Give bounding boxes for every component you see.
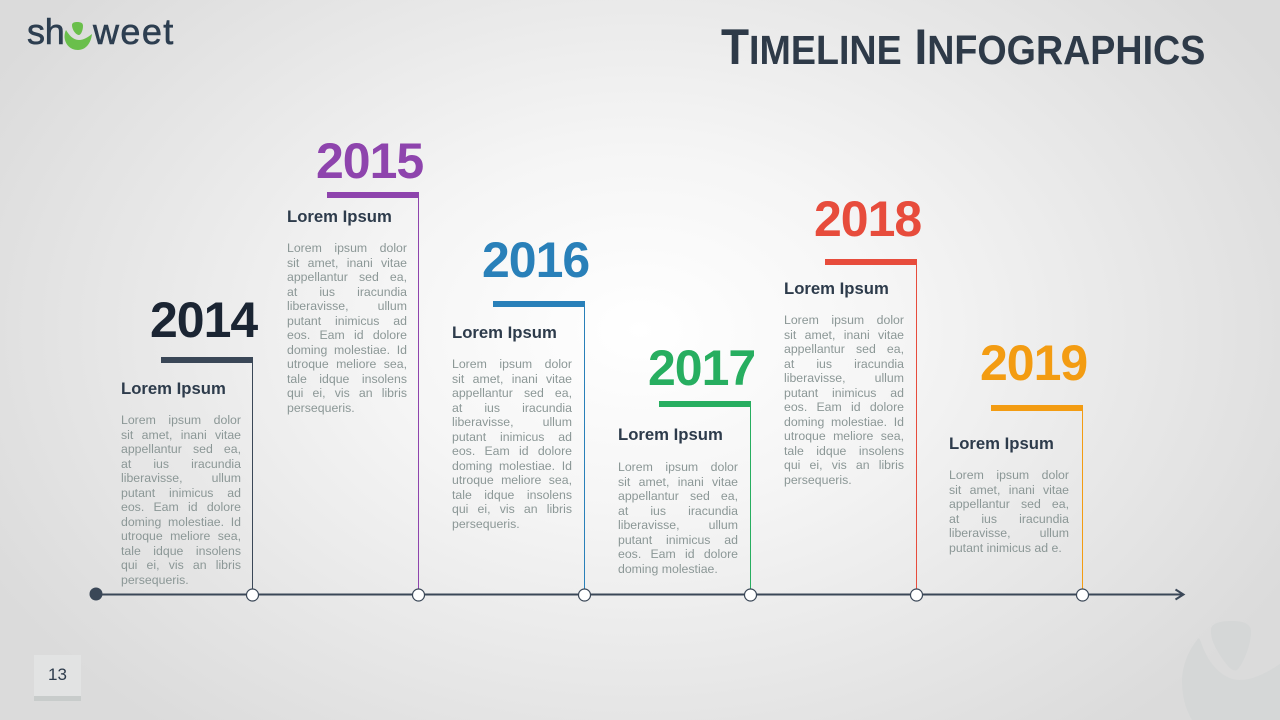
- flag bar: [327, 192, 419, 198]
- body text: putant inimicus ad: [618, 532, 738, 546]
- body text: liberavisse, ullum: [949, 526, 1069, 540]
- body text: [121, 413, 241, 586]
- body text: appellantur sed ea,: [452, 386, 572, 400]
- body text: putant inimicus ad: [452, 430, 572, 444]
- body text: liberavisse, ullum: [121, 471, 241, 485]
- body text: qui ei, vis an libris: [287, 386, 407, 400]
- body text: utroque meliore sea,: [452, 473, 572, 487]
- body text: utroque meliore sea,: [121, 529, 241, 543]
- body text: putant inimicus ad: [287, 314, 407, 328]
- body text: sit amet, inani vitae: [452, 372, 572, 386]
- heading: Lorem Ipsum: [949, 434, 1054, 453]
- body text: at ius iracundia: [452, 400, 572, 414]
- marker 2019: [1076, 589, 1088, 601]
- year 2018: 2018: [814, 191, 921, 247]
- body text: eos. Eam id dolore: [784, 400, 904, 414]
- marker 2016: [578, 589, 590, 601]
- body text: doming molestiae. Id: [121, 514, 241, 528]
- body text: liberavisse, ullum: [618, 518, 738, 532]
- body text: tale idque insolens: [121, 544, 241, 558]
- milestone: 2018: [784, 191, 921, 588]
- axis line: [96, 590, 1184, 600]
- body text: qui ei, vis an libris: [452, 502, 572, 516]
- body text: doming molestiae. Id: [784, 414, 904, 428]
- flag bar: [493, 301, 585, 307]
- body text: eos. Eam id dolore: [452, 444, 572, 458]
- body text: at ius iracundia: [121, 456, 241, 470]
- logo wordmark start: sh: [27, 11, 64, 52]
- body text: doming molestiae. Id: [452, 458, 572, 472]
- logo: showeet: [27, 11, 175, 52]
- stem: [584, 301, 585, 594]
- year 2017: 2017: [648, 340, 755, 396]
- milestone: 2014: [121, 292, 258, 588]
- heading: Lorem Ipsum: [121, 379, 226, 398]
- body text: tale idque insolens: [452, 488, 572, 502]
- body text: qui ei, vis an libris: [784, 458, 904, 472]
- body text: [618, 460, 738, 576]
- body text: liberavisse, ullum: [287, 299, 407, 313]
- stem: [916, 259, 917, 594]
- body text: sit amet, inani vitae: [949, 482, 1069, 496]
- marker 2015: [412, 589, 424, 601]
- milestone: 2019: [949, 335, 1087, 588]
- watermark logo: [1170, 610, 1280, 720]
- body text: utroque meliore sea,: [287, 357, 407, 371]
- body text: doming molestiae. Id: [287, 342, 407, 356]
- body text: eos. Eam id dolore: [287, 328, 407, 342]
- body text: utroque meliore sea,: [784, 429, 904, 443]
- body text: [784, 313, 904, 486]
- body text: at ius iracundia: [618, 504, 738, 518]
- marker 2014: [246, 589, 258, 601]
- marker 2018: [910, 589, 922, 601]
- body text: appellantur sed ea,: [287, 270, 407, 284]
- body text: persequeris.: [452, 516, 520, 530]
- page number: 13: [48, 665, 67, 684]
- body text: tale idque insolens: [287, 372, 407, 386]
- page number: [34, 655, 81, 701]
- body text: [949, 468, 1069, 554]
- stem: [750, 401, 751, 594]
- body text: putant inimicus ad: [121, 486, 241, 500]
- logo icon: [64, 22, 92, 50]
- body text: qui ei, vis an libris: [121, 558, 241, 572]
- body text: persequeris.: [287, 400, 355, 414]
- body text: Lorem ipsum dolor: [452, 357, 572, 371]
- heading: Lorem Ipsum: [784, 279, 889, 298]
- start dot: [90, 588, 102, 600]
- flag bar: [659, 401, 751, 407]
- body text: [452, 357, 572, 530]
- year 2016: 2016: [482, 232, 589, 288]
- heading: Lorem Ipsum: [287, 207, 392, 226]
- body text: appellantur sed ea,: [784, 342, 904, 356]
- body text: putant inimicus ad: [784, 386, 904, 400]
- flag bar: [825, 259, 917, 265]
- body text: persequeris.: [121, 572, 189, 586]
- body text: eos. Eam id dolore: [121, 500, 241, 514]
- flag bar: [991, 405, 1083, 411]
- milestone: 2017: [618, 340, 755, 588]
- body text: at ius iracundia: [784, 356, 904, 370]
- year 2014: 2014: [150, 292, 257, 348]
- milestone: 2016: [452, 232, 589, 588]
- body text: sit amet, inani vitae: [287, 256, 407, 270]
- body text: liberavisse, ullum: [784, 371, 904, 385]
- body text: Lorem ipsum dolor: [949, 468, 1069, 482]
- body text: sit amet, inani vitae: [121, 428, 241, 442]
- timeline axis with arrow and markers: [90, 588, 1186, 602]
- year 2015: 2015: [316, 133, 423, 189]
- body text: appellantur sed ea,: [618, 489, 738, 503]
- body text: liberavisse, ullum: [452, 415, 572, 429]
- milestone: 2015: [287, 133, 423, 588]
- body text: tale idque insolens: [784, 444, 904, 458]
- body text: doming molestiae.: [618, 562, 718, 576]
- body text: persequeris.: [784, 472, 852, 486]
- marker 2017: [744, 589, 756, 601]
- body text: Lorem ipsum dolor: [618, 460, 738, 474]
- body text: [287, 241, 407, 414]
- body text: at ius iracundia: [949, 512, 1069, 526]
- stem: [418, 192, 419, 594]
- body text: appellantur sed ea,: [949, 497, 1069, 511]
- stem: [252, 357, 253, 594]
- body text: sit amet, inani vitae: [618, 474, 738, 488]
- body text: putant inimicus ad e.: [949, 540, 1062, 554]
- heading: Lorem Ipsum: [452, 323, 557, 342]
- logo wordmark end: weet: [93, 11, 175, 52]
- flag bar: [161, 357, 253, 363]
- body text: Lorem ipsum dolor: [121, 413, 241, 427]
- year 2019: 2019: [980, 335, 1087, 391]
- body text: Lorem ipsum dolor: [287, 241, 407, 255]
- body text: sit amet, inani vitae: [784, 328, 904, 342]
- body text: appellantur sed ea,: [121, 442, 241, 456]
- title: TIMELINE INFOGRAPHICS: [721, 19, 1205, 75]
- stem: [1082, 405, 1083, 594]
- body text: eos. Eam id dolore: [618, 547, 738, 561]
- heading: Lorem Ipsum: [618, 425, 723, 444]
- body text: at ius iracundia: [287, 284, 407, 298]
- body text: Lorem ipsum dolor: [784, 313, 904, 327]
